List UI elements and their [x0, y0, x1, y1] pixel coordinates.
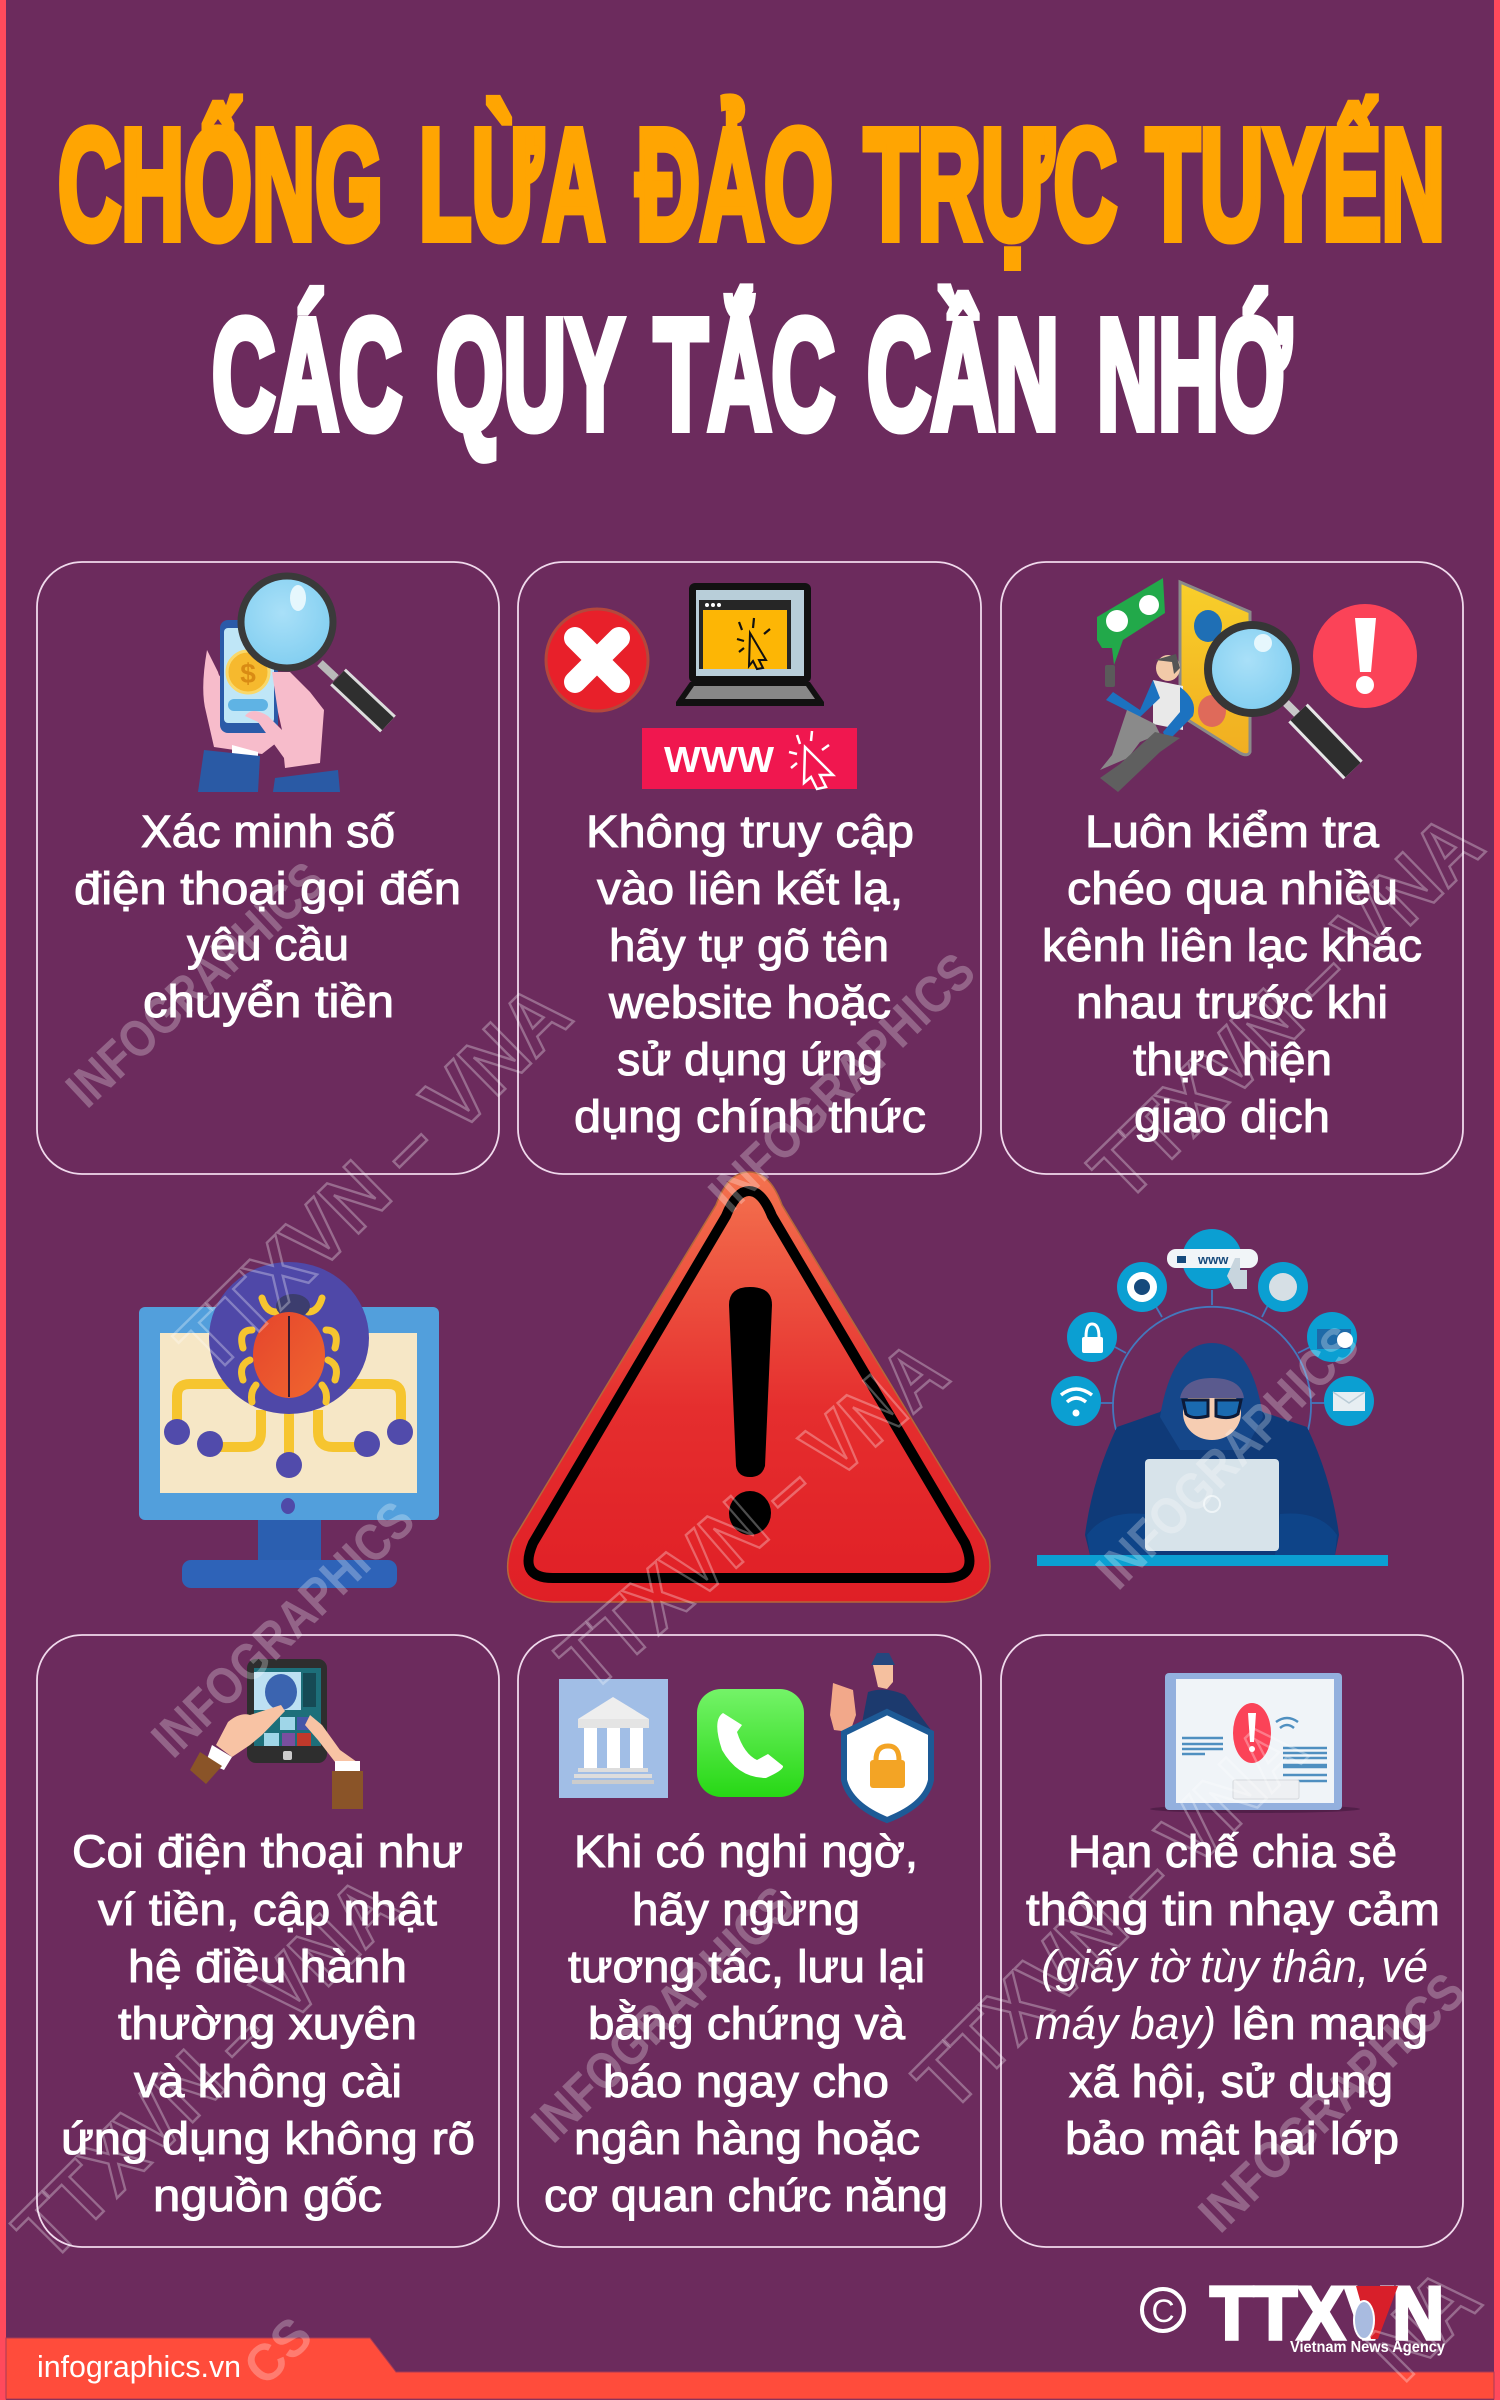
watermarks: TTXVN – VNA — [159, 966, 588, 1391]
panel: card 3 — [1001, 562, 1463, 1174]
icon: hacker at laptop: www — [1197, 1252, 1229, 1267]
card 5 text — [544, 1826, 948, 2221]
title line 2: CẦN — [867, 286, 1059, 462]
card 6 text: lên mạng — [1232, 1998, 1428, 2049]
card 2 text — [574, 806, 926, 1142]
card 2 text: hãy tự gõ tên — [609, 920, 889, 971]
watermarks: TTXVN – VNA — [0, 1858, 416, 2278]
icon: warning triangle — [508, 1172, 990, 1602]
title line 2: QUY — [436, 288, 624, 462]
watermarks: INFOGRAPHICS — [1085, 1316, 1370, 1600]
watermarks: TTXVN – VNA — [540, 1323, 964, 1709]
icon: laptop — [676, 583, 824, 706]
card 2 text: vào liên kết lạ, — [597, 863, 903, 914]
card 3 text: kênh liên lạc khác — [1042, 920, 1422, 971]
panel: card 1 — [37, 562, 499, 1174]
icon: person with phones and magnifier — [1097, 578, 1353, 792]
card 5 text: cơ quan chức năng — [544, 2170, 948, 2221]
title line 1 — [58, 96, 1445, 272]
card 4 text: và không cài — [134, 2056, 402, 2107]
icon: police with shield — [830, 1653, 931, 1820]
footer website label: infographics.vn — [37, 2349, 241, 2384]
card 5 text: bằng chứng và — [588, 1998, 906, 2049]
watermarks: INFOGRAPHICS — [56, 851, 337, 1119]
card 4 text: Coi điện thoại như — [72, 1826, 463, 1877]
card 4 text — [61, 1826, 475, 2221]
card 2 text: website hoặc — [608, 977, 891, 1028]
card 3 text — [1042, 806, 1422, 1142]
icon: phone with magnifier: $ — [240, 658, 256, 689]
card 4 text: ví tiền, cập nhật — [98, 1884, 438, 1935]
card 3 text: thực hiện — [1133, 1034, 1332, 1085]
card 6 text: máy bay) — [1035, 1998, 1216, 2049]
card 3 text: nhau trước khi — [1076, 977, 1388, 1028]
card 4 text: nguồn gốc — [153, 2170, 382, 2221]
icon: red cross button — [546, 609, 648, 711]
watermarks: INFOGRAPHICS — [141, 1491, 426, 1769]
card 2 text: sử dụng ứng — [617, 1034, 883, 1085]
card 4 text: hệ điều hành — [128, 1941, 407, 1992]
panel: card 5 — [518, 1635, 981, 2247]
footer band — [6, 2338, 1494, 2399]
card 1 text — [74, 806, 461, 1027]
icon: www banner: WWW — [664, 739, 774, 780]
card 6 text: (giấy tờ tùy thân, vé — [1041, 1941, 1428, 1992]
card 4 text: ứng dụng không rõ — [61, 2113, 475, 2164]
card 6 text: thông tin nhạy cảm — [1026, 1884, 1440, 1935]
card 1 text: điện thoại gọi đến — [74, 863, 461, 914]
card 5 text: hãy ngừng — [632, 1884, 860, 1935]
icon: computer with bug — [139, 1262, 439, 1588]
card 2 text: dụng chính thức — [574, 1091, 926, 1142]
card 1 text: chuyển tiền — [143, 976, 394, 1027]
card 3 text: chéo qua nhiều — [1067, 863, 1398, 914]
title line 2: TẮC — [654, 286, 835, 462]
watermarks: INFOGRAPHICS — [698, 942, 987, 1224]
watermarks: NA — [1349, 2250, 1497, 2398]
card 4 text: thường xuyên — [118, 1998, 417, 2049]
logo: TTXVN: C — [1151, 2293, 1175, 2329]
card 6 text — [1026, 1826, 1440, 2164]
card 6 text: xã hội, sử dụng — [1069, 2056, 1393, 2107]
title — [58, 96, 1445, 462]
icon: hacker at laptop — [1037, 1229, 1388, 1566]
title line 1: CHỐNG — [58, 98, 383, 272]
card 5 text: ngân hàng hoặc — [574, 2113, 920, 2164]
icon: screen with alert — [1150, 1673, 1360, 1813]
watermarks — [0, 796, 1500, 2398]
icon: hands holding phone — [190, 1659, 363, 1809]
panel: card 2 — [518, 562, 981, 1174]
watermarks: TTXVN – VNA — [896, 1701, 1323, 2128]
icon: red alert circle — [1313, 604, 1417, 708]
title line 1: LỪA — [419, 98, 605, 272]
card 6 text: Hạn chế chia sẻ — [1068, 1826, 1397, 1877]
panel: card 4 — [37, 1635, 499, 2247]
card 3 text: Luôn kiểm tra — [1085, 806, 1380, 857]
card 5 text: báo ngay cho — [603, 2056, 889, 2107]
card 5 text: Khi có nghi ngờ, — [574, 1826, 918, 1877]
icon: bank — [559, 1679, 668, 1798]
title line 2: CÁC — [212, 288, 402, 462]
title line 1: ĐẢO — [636, 96, 833, 272]
watermarks: INFOGRAPHICS — [521, 1876, 806, 2154]
card 6 text: bảo mật hai lớp — [1065, 2113, 1399, 2164]
title line 2: NHỚ — [1097, 288, 1291, 462]
card 3 text: giao dịch — [1134, 1091, 1330, 1142]
logo: TTXVN: Vietnam News Agency — [1290, 2339, 1445, 2356]
card 1 text: yêu cầu — [187, 919, 349, 970]
card 5 text: tương tác, lưu lại — [568, 1941, 925, 1992]
title line 2 — [212, 286, 1291, 462]
panel: card 6 — [1001, 1635, 1463, 2247]
watermarks: CS — [233, 2306, 324, 2397]
title line 1: TRỰC — [864, 98, 1117, 272]
logo: TTXVN: TTXVN — [1210, 2271, 1444, 2355]
card 1 text: Xác minh số — [141, 806, 395, 857]
card 2 text: Không truy cập — [586, 806, 914, 857]
icon: phone app — [697, 1689, 804, 1797]
icon: phone with magnifier — [198, 576, 388, 792]
icon: www banner — [642, 728, 857, 789]
